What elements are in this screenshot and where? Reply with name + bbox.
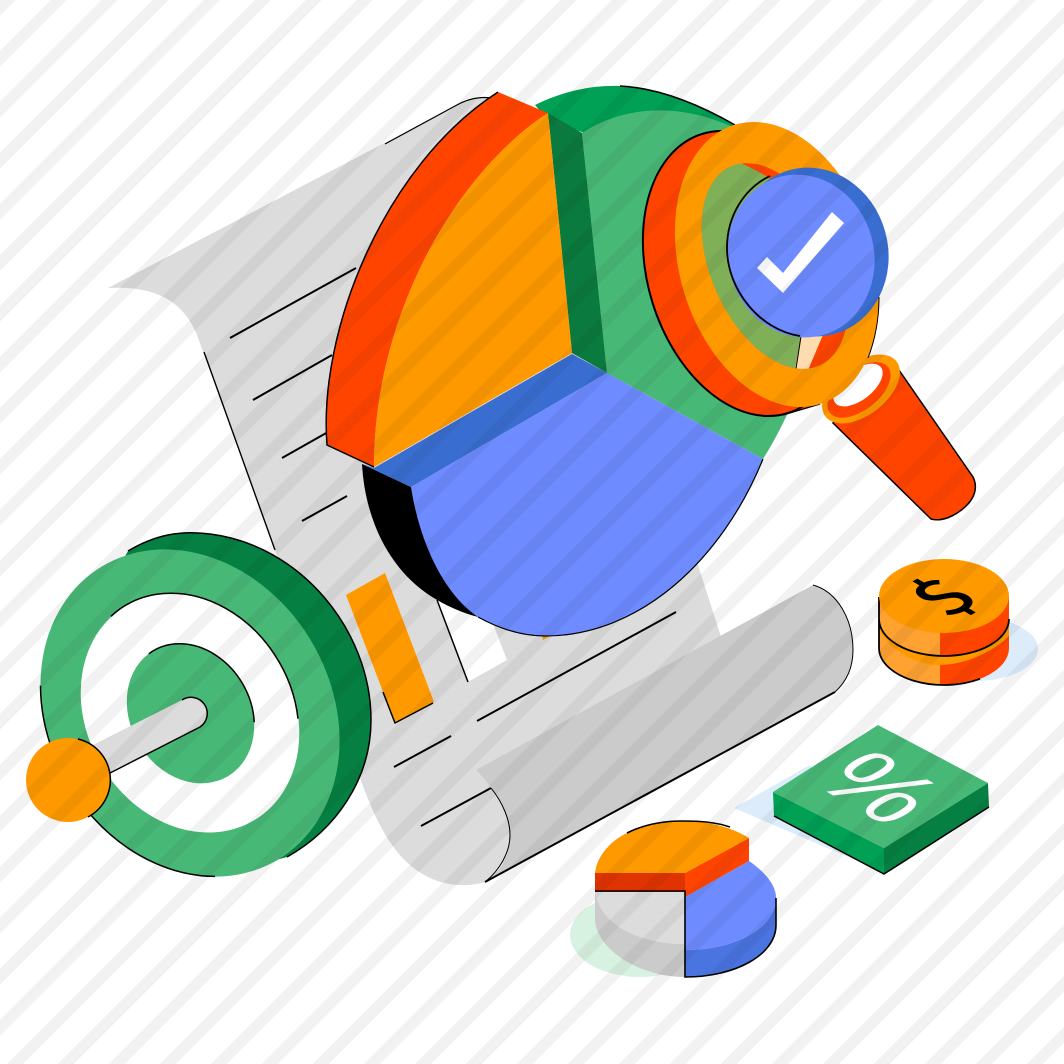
small pie shadow <box>570 893 710 977</box>
wheel face <box>0 494 399 932</box>
coin shadow <box>912 617 1038 681</box>
white bar edge <box>437 600 468 682</box>
white bar cut-out <box>437 590 507 682</box>
blue side <box>362 354 607 487</box>
tile left side <box>773 792 884 874</box>
tile edges <box>774 807 989 874</box>
percent tile <box>734 725 989 874</box>
wheel side <box>100 533 371 877</box>
paper roll <box>476 585 853 882</box>
collar ring <box>818 351 900 429</box>
tile shadow <box>734 765 880 862</box>
gray slice face <box>595 892 685 944</box>
wheel opening <box>37 553 343 873</box>
red side dark <box>595 873 685 892</box>
handle <box>833 360 975 520</box>
axle <box>93 697 207 773</box>
check mark <box>757 212 844 293</box>
peach sliver <box>795 336 822 369</box>
small pie chart <box>570 821 776 977</box>
handle collar <box>810 341 912 437</box>
paper receipt <box>108 97 722 885</box>
coin stack <box>879 559 1038 685</box>
tile right side <box>884 783 989 874</box>
dollar sign: $ <box>879 560 1001 630</box>
blue slice face <box>411 373 763 636</box>
lens back rim <box>690 129 820 415</box>
text lines <box>230 268 676 826</box>
green slice face <box>582 110 810 459</box>
orange bar <box>346 573 434 723</box>
badge back <box>717 150 907 354</box>
target wheel <box>0 494 399 932</box>
paper outline <box>385 97 505 144</box>
big pie chart <box>326 86 810 636</box>
roll outlines <box>813 585 853 692</box>
percent sign: % <box>792 736 969 839</box>
coin top <box>879 559 1009 633</box>
tile top <box>773 725 988 848</box>
coin band <box>879 619 1009 665</box>
paper sheet <box>108 97 722 885</box>
orange slice face <box>374 113 572 467</box>
green slice rim <box>535 86 740 135</box>
tinted pie behind lens <box>702 164 800 368</box>
roll body <box>476 585 853 882</box>
badge face <box>709 158 893 354</box>
small pie outlines <box>595 821 776 977</box>
orange bar edge <box>383 692 433 723</box>
magnifying glass <box>642 122 976 520</box>
black slice side <box>362 464 478 617</box>
wheel hub <box>101 620 280 807</box>
gray slice side <box>595 892 685 977</box>
collar opening <box>826 355 890 415</box>
coin outlines <box>879 597 1009 685</box>
orange bar behind pie <box>540 622 558 640</box>
axle cap <box>26 738 110 822</box>
dark green side <box>548 113 607 373</box>
blue slice top <box>685 861 776 950</box>
coin side right <box>940 597 1009 685</box>
coin side left <box>879 597 940 685</box>
red side light <box>685 838 749 897</box>
lens interior <box>702 163 846 369</box>
lens front ring <box>642 97 912 432</box>
red rim <box>326 92 548 467</box>
orange top <box>595 821 749 873</box>
blue slice side <box>685 898 776 977</box>
